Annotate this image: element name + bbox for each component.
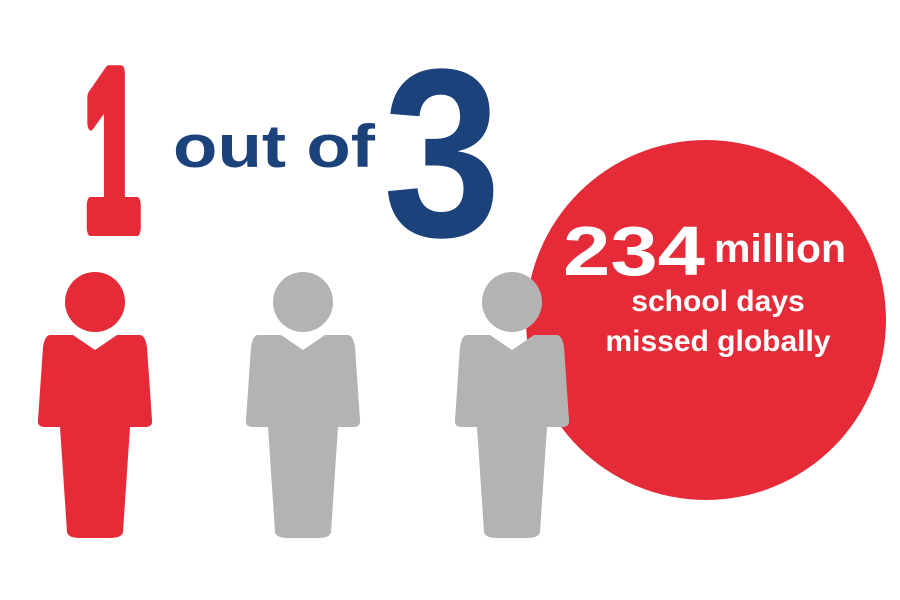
person icon: grey 2 [455, 272, 569, 538]
red circle callout: missed globally [605, 325, 831, 358]
red circle callout: million [714, 227, 846, 271]
person icon: red [38, 272, 152, 538]
stat: 234 million: 234 [563, 212, 705, 290]
caption: school days [631, 285, 805, 318]
text: 1 [84, 24, 140, 276]
red circle callout [526, 140, 886, 500]
person icon: grey 1 [246, 272, 360, 538]
text: out of: out of [173, 113, 376, 180]
big number three: 3 [383, 19, 501, 287]
